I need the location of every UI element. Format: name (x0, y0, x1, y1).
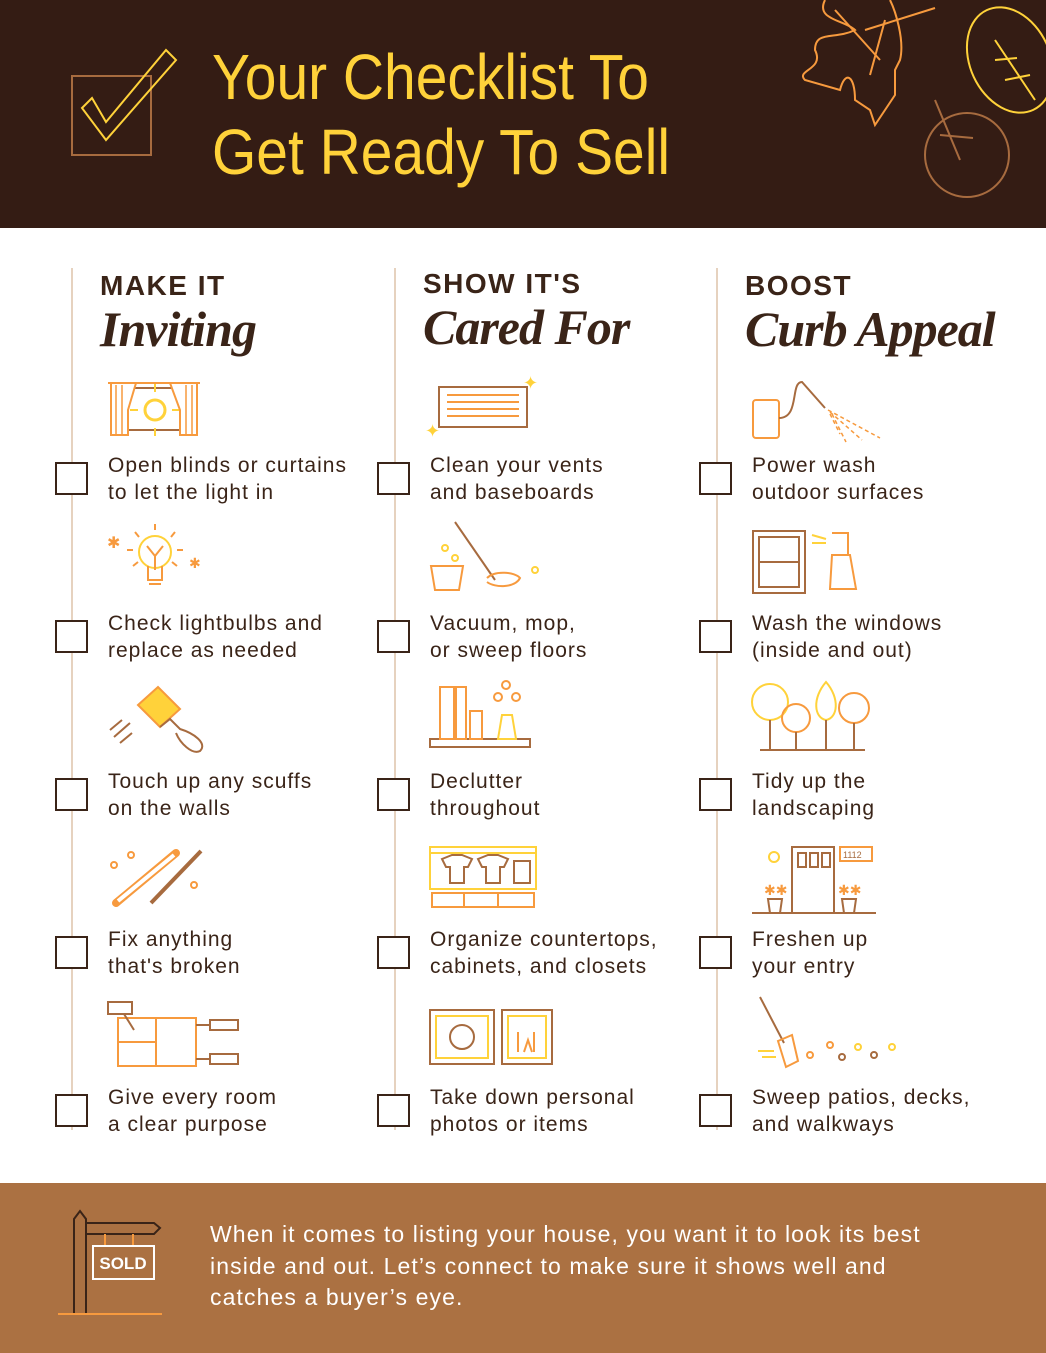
icon: sold sign: SOLD (99, 1254, 147, 1273)
footer panel (0, 1183, 1046, 1353)
icon: broom (758, 996, 896, 1068)
column 3 items: outdoor surfaces (752, 481, 924, 504)
icon: photo frames (429, 1009, 553, 1065)
column heading: Show it's Cared For: SHOW IT'S (423, 268, 582, 299)
icon: power washer (752, 381, 880, 442)
column 2 items (430, 454, 604, 504)
icon: tools (110, 849, 202, 907)
text: replace as needed (108, 639, 298, 662)
column heading: Make it Inviting (100, 270, 256, 357)
text: Take down personal (430, 1086, 635, 1109)
icon: mop (430, 521, 539, 591)
icon: lightbulb: ✱ (189, 555, 201, 571)
text: a clear purpose (108, 1113, 268, 1136)
icon: front door (752, 846, 876, 914)
footer text: inside and out. Let’s connect to make sure it shows well and (210, 1252, 887, 1278)
text: landscaping (752, 797, 875, 820)
column heading: Make it Inviting: Inviting (100, 301, 256, 357)
column 2 items: Clean your vents (430, 454, 604, 477)
text: photos or items (430, 1113, 589, 1136)
icon: header checkbox (71, 48, 178, 156)
column heading: Make it Inviting: MAKE IT (100, 270, 226, 301)
icon: vent: ✦ (523, 373, 538, 393)
text: and walkways (752, 1113, 895, 1136)
icon: lightbulb: ✱ (107, 535, 120, 552)
column 3 items (752, 454, 924, 504)
column heading: Boost Curb Appeal: BOOST (745, 270, 852, 301)
icon: shelf (429, 680, 531, 748)
icon: window & spray (752, 530, 858, 594)
icon: trees (751, 680, 870, 751)
title (212, 41, 670, 188)
column heading: Show it's Cared For: Cared For (423, 299, 629, 355)
text: throughout (430, 797, 540, 820)
text: Touch up any scuffs (108, 770, 312, 793)
icon: floor plan (107, 1001, 239, 1067)
icon: vent (425, 373, 538, 441)
icon: vent: ✦ (425, 421, 440, 441)
text: Wash the windows (752, 612, 942, 635)
text: Organize countertops, (430, 928, 658, 951)
icon: front door: ✱✱ (764, 882, 787, 898)
column 3 items: Power wash (752, 454, 876, 477)
text: Tidy up the (752, 770, 866, 793)
text: cabinets, and closets (430, 955, 647, 978)
text: Give every room (108, 1086, 277, 1109)
text: Freshen up (752, 928, 868, 951)
text: or sweep floors (430, 639, 587, 662)
column heading: Boost Curb Appeal: Curb Appeal (745, 301, 995, 357)
column heading: Boost Curb Appeal (745, 270, 996, 357)
text: your entry (752, 955, 855, 978)
column 1 items: Open blinds or curtains (108, 454, 347, 477)
text: Fix anything (108, 928, 233, 951)
header banner (0, 0, 1046, 228)
text: Check lightbulbs and (108, 612, 323, 635)
column 1 items: to let the light in (108, 481, 274, 504)
footer text: When it comes to listing your house, you want it to look its best (210, 1221, 921, 1247)
icon: front door: 1112 (843, 850, 862, 860)
icon: curtains (108, 382, 200, 436)
title: Your Checklist To (212, 41, 649, 113)
icon: sold sign (58, 1210, 162, 1315)
column heading: Show it's Cared For (423, 268, 631, 355)
text: Vacuum, mop, (430, 612, 576, 635)
title: Get Ready To Sell (212, 116, 670, 188)
text: that's broken (108, 955, 241, 978)
icon: closet (429, 846, 537, 908)
icon: front door: ✱✱ (838, 882, 861, 898)
icon: paint brush (109, 686, 204, 753)
column 2 items: and baseboards (430, 481, 595, 504)
text: Sweep patios, decks, (752, 1086, 970, 1109)
column 1 items (108, 454, 347, 504)
text: Declutter (430, 770, 523, 793)
text: (inside and out) (752, 639, 913, 662)
footer text (210, 1221, 921, 1310)
icon: autumn leaves (802, 0, 1046, 198)
icon: lightbulb (107, 524, 201, 585)
text: on the walls (108, 797, 231, 820)
footer text: catches a buyer’s eye. (210, 1284, 463, 1310)
